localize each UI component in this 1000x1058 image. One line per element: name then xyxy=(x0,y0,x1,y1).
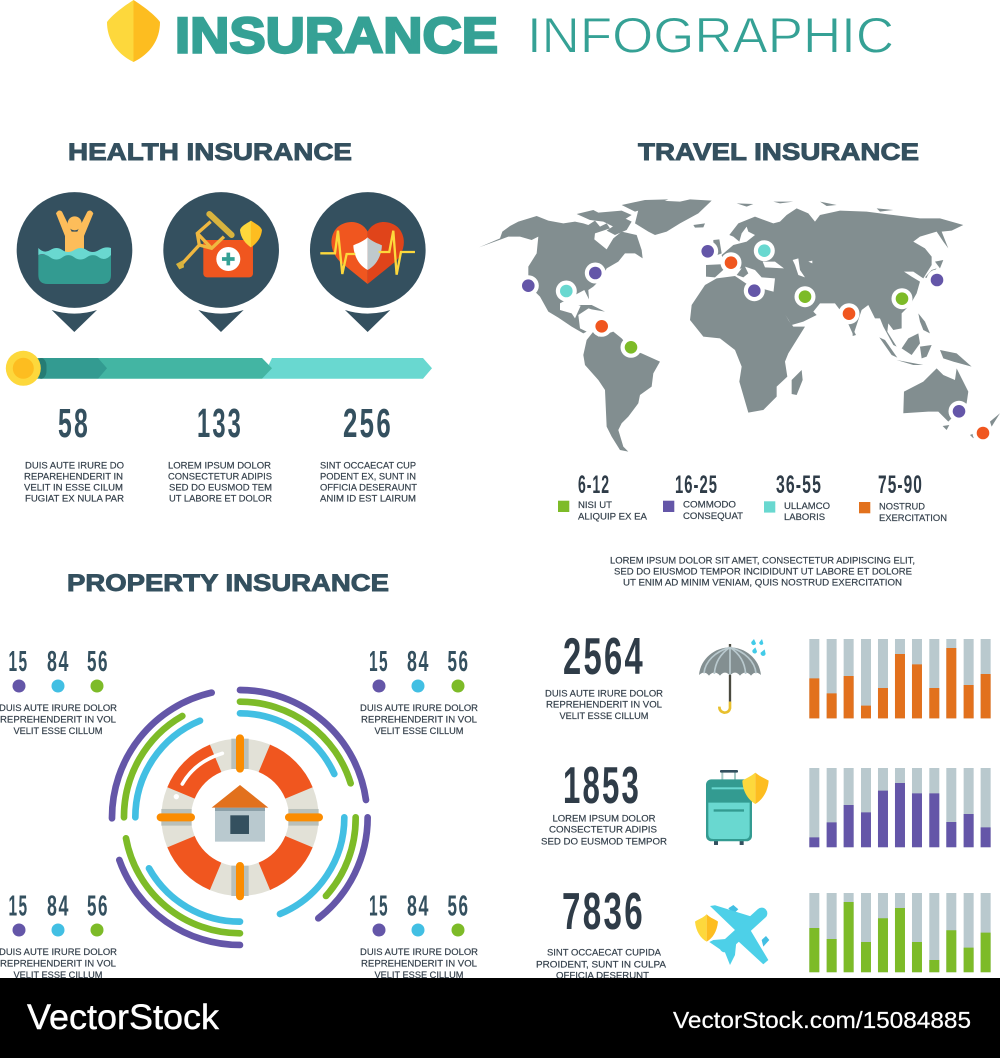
legend: 16-25: CONSEQUAT xyxy=(683,510,743,521)
bar chart: green xyxy=(809,893,991,972)
stat column: 256: 256 xyxy=(343,400,393,446)
stat group: bottom left: VELIT ESSE CILLUM xyxy=(14,969,103,980)
panel: property insurance xyxy=(0,570,478,980)
stat column: 133: 133 xyxy=(197,400,243,446)
legend: 75-90: 75-90 xyxy=(878,471,923,499)
stat group: bottom right xyxy=(360,890,478,980)
lifebuoy with house xyxy=(161,738,319,896)
world map xyxy=(479,199,1000,452)
stat column: 58: VELIT IN ESSE CILUM xyxy=(24,482,123,493)
stat group: bottom right: DUIS AUTE IRURE DOLOR xyxy=(360,946,478,957)
travel description text xyxy=(610,554,915,588)
watermark footer band: VectorStock.com/15084885 xyxy=(673,1007,971,1033)
stat group: bottom left xyxy=(0,890,117,980)
travel description text: SED DO EIUSMOD TEMPOR INCIDIDUNT UT LABORE ET DOLORE xyxy=(614,566,912,576)
stat row: 7836 xyxy=(536,883,667,980)
legend: 6-12: 6-12 xyxy=(578,471,610,499)
stat column: 58 xyxy=(24,400,124,504)
stat row: 7836: SINT OCCAECAT CUPIDA xyxy=(547,946,662,958)
stat column: 256: OFFICIA DESERAUNT xyxy=(320,482,417,493)
panel: statistics rows xyxy=(536,628,991,980)
bar chart: purple xyxy=(809,768,991,847)
watermark footer band xyxy=(0,978,1000,1058)
travel description text: UT ENIM AD MINIM VENIAM, QUIS NOSTRUD EXERCITATION xyxy=(623,576,902,588)
title text xyxy=(175,8,894,64)
legend: 16-25: 16-25 xyxy=(675,471,718,499)
stat column: 58: FUGIAT EX NULA PAR xyxy=(25,493,124,504)
stat column: 133: LOREM IPSUM DOLOR xyxy=(168,460,271,470)
watermark footer band: VectorStock xyxy=(27,998,220,1037)
legend: 16-25: COMMODO xyxy=(683,498,736,510)
stat group: top right: 84 xyxy=(407,646,430,678)
stat row: 1853: LOREM IPSUM DOLOR xyxy=(552,812,656,824)
bar chart: orange xyxy=(809,639,991,718)
stat group: bottom right: 84 xyxy=(407,890,430,922)
map pins xyxy=(518,240,994,444)
stat column: 256: PODENT EX, SUNT IN xyxy=(320,470,416,482)
map: americas xyxy=(479,199,668,452)
stat column: 133: UT LABORE ET DOLOR xyxy=(169,493,272,504)
stat column: 256: ANIM ID EST LAIRUM xyxy=(320,493,416,504)
stat group: bottom right: REPREHENDERIT IN VOL xyxy=(361,958,477,968)
stat row: 2564: DUIS AUTE IRURE DOLOR xyxy=(545,688,663,698)
stat column: 256 xyxy=(320,400,417,504)
stat row: 1853 xyxy=(541,757,667,846)
stat group: top right: DUIS AUTE IRURE DOLOR xyxy=(360,702,478,713)
stat group: top right: 15 xyxy=(369,646,389,678)
title text: INSURANCE xyxy=(175,8,498,64)
stat group: bottom right: 15 xyxy=(369,890,389,922)
stat group: top left: DUIS AUTE IRURE DOLOR xyxy=(0,702,117,713)
legend: 75-90: NOSTRUD xyxy=(879,500,925,512)
title text: INFOGRAPHIC xyxy=(527,8,894,64)
icon: title shield xyxy=(107,0,160,62)
title with shield xyxy=(107,0,894,64)
stat group: top left: VELIT ESSE CILLUM xyxy=(14,725,103,736)
stat group: bottom left: 15 xyxy=(8,890,28,922)
stat group: top right: REPREHENDERIT IN VOL xyxy=(361,714,477,724)
stat column: 58: 58 xyxy=(58,400,90,446)
legend: 75-90 xyxy=(859,471,947,523)
travel description text: LOREM IPSUM DOLOR SIT AMET, CONSECTETUR ADIPISCING ELIT, xyxy=(610,554,915,566)
stat group: top left: 84 xyxy=(47,646,70,678)
stat group: bottom right: VELIT ESSE CILLUM xyxy=(374,969,464,980)
stat column: 256: SINT OCCAECAT CUP xyxy=(320,460,416,470)
stat column: 133: SED DO EUSMOD TEM xyxy=(169,482,272,493)
icon: plane with shield xyxy=(695,905,769,965)
progress arrow bar xyxy=(6,351,432,386)
stat row: 1853: SED DO EUSMOD TEMPOR xyxy=(541,836,667,846)
stat group: top left: 56 xyxy=(87,646,109,678)
icon: suitcase with shield xyxy=(706,770,769,845)
legend: 6-12: ALIQUIP EX EA xyxy=(578,510,648,522)
stat column: 133 xyxy=(168,400,272,504)
legend: 36-55: LABORIS xyxy=(784,511,825,522)
stat group: top right xyxy=(360,646,478,736)
stat row: 2564: 2564 xyxy=(563,628,645,686)
stat group: bottom right: 56 xyxy=(448,890,470,922)
icon: drowning person pin xyxy=(17,192,132,332)
icon: heart and pulse pin xyxy=(310,192,426,332)
icon: crutch and first aid pin xyxy=(163,192,279,332)
heading: property insurance: PROPERTY INSURANCE xyxy=(67,570,389,597)
stat group: top left: 15 xyxy=(8,646,28,678)
stat group: bottom left: 56 xyxy=(87,890,109,922)
stat row: 1853: CONSECTETUR ADIPIS xyxy=(549,824,657,834)
stat column: 58: DUIS AUTE IRURE DO xyxy=(25,460,124,470)
radial arcs around lifebuoy xyxy=(112,690,368,945)
stat row: 2564 xyxy=(545,628,663,721)
panel: travel insurance xyxy=(479,139,1000,588)
stat group: bottom left: REPREHENDERIT IN VOL xyxy=(0,958,116,968)
stat column: 133: CONSECTETUR ADIPIS xyxy=(168,470,272,482)
panel: health insurance xyxy=(6,139,432,504)
stat row: 2564: VELIT ESSE CILLUM xyxy=(560,710,649,721)
stat column: 58: REPAREHENDERIT IN xyxy=(24,470,123,482)
legend: 36-55 xyxy=(764,471,830,522)
legend: 75-90: EXERCITATION xyxy=(879,512,947,523)
icon: umbrella xyxy=(699,639,766,713)
map: europe asia africa oceania xyxy=(635,199,1000,438)
stat group: top left xyxy=(0,646,117,736)
heading: travel insurance: TRAVEL INSURANCE xyxy=(638,139,919,166)
legend: 36-55: 36-55 xyxy=(776,471,822,499)
stat row: 7836: 7836 xyxy=(562,883,645,941)
legend: 6-12: NISI UT xyxy=(578,499,612,510)
stat row: 2564: REPREHENDERIT IN VOL xyxy=(546,698,662,710)
stat row: 7836: PROIDENT, SUNT IN CULPA xyxy=(536,958,667,970)
legend: 16-25 xyxy=(663,471,743,521)
stat group: bottom left: DUIS AUTE IRURE DOLOR xyxy=(0,946,117,957)
stat group: bottom left: 84 xyxy=(47,890,70,922)
stat group: top right: VELIT ESSE CILLUM xyxy=(374,725,464,736)
stat row: 7836: OFFICIA DESERUNT xyxy=(556,970,649,980)
heading: health insurance: HEALTH INSURANCE xyxy=(68,139,352,166)
stat group: top left: REPREHENDERIT IN VOL xyxy=(0,714,116,724)
legend: 6-12 xyxy=(558,471,648,522)
stat group: top right: 56 xyxy=(448,646,470,678)
stat row: 1853: 1853 xyxy=(563,757,641,815)
legend: 36-55: ULLAMCO xyxy=(784,500,830,511)
